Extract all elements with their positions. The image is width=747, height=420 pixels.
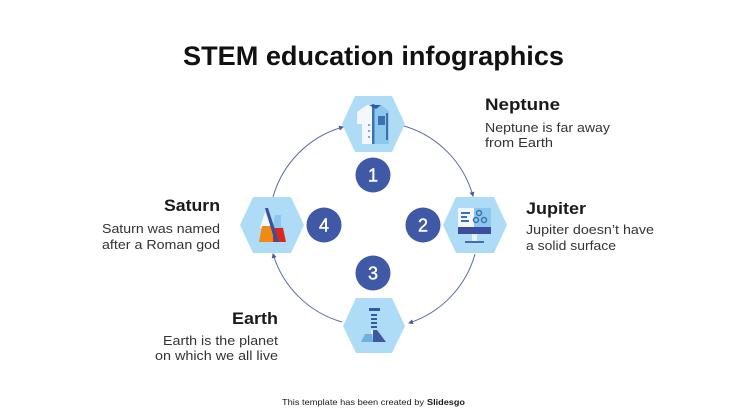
badge 2: 2 bbox=[418, 216, 428, 236]
text: Neptune: Neptune is far away bbox=[485, 120, 611, 135]
text: Jupiter: a solid surface bbox=[526, 238, 616, 253]
icon: Jupiter computer hexagon bbox=[443, 197, 507, 253]
text: Saturn: after a Roman god bbox=[102, 237, 220, 252]
text: Neptune: from Earth bbox=[485, 135, 553, 150]
text: Saturn: Saturn was named bbox=[102, 221, 220, 236]
text: Jupiter bbox=[526, 200, 654, 253]
text: Earth: Earth is the planet bbox=[163, 333, 278, 348]
icon: Neptune lab coat hexagon bbox=[342, 96, 405, 152]
text: Earth: Earth bbox=[232, 310, 278, 328]
badge 4 bbox=[306, 208, 342, 242]
text: Saturn: Saturn bbox=[164, 197, 220, 215]
badge 3: 3 bbox=[368, 264, 378, 284]
text: Neptune bbox=[485, 96, 611, 150]
badge 1: 1 bbox=[368, 166, 378, 186]
badge 3 bbox=[356, 256, 390, 290]
badge 4: 4 bbox=[319, 216, 329, 236]
text: Earth bbox=[155, 310, 278, 363]
text: Neptune: Neptune bbox=[485, 96, 560, 114]
footer credit: This template has been created by bbox=[282, 397, 425, 407]
title: STEM education infographics bbox=[183, 41, 564, 71]
arrow: Earth to Saturn bbox=[273, 254, 342, 322]
badge 1 bbox=[356, 158, 390, 192]
badge 2 bbox=[406, 208, 440, 242]
arrow: Jupiter to Earth bbox=[409, 254, 475, 323]
footer credit: Slidesgo bbox=[427, 397, 465, 407]
text: Jupiter: Jupiter bbox=[526, 200, 587, 218]
icon: Earth flask hexagon bbox=[343, 298, 405, 353]
icon: Saturn beaker hexagon bbox=[240, 197, 304, 253]
arrow: Saturn to Neptune bbox=[273, 127, 343, 197]
text: Saturn bbox=[102, 197, 220, 252]
arrow: Neptune to Jupiter bbox=[404, 126, 473, 196]
text: Jupiter: Jupiter doesn’t have bbox=[526, 222, 654, 237]
text: Earth: on which we all live bbox=[155, 348, 278, 363]
